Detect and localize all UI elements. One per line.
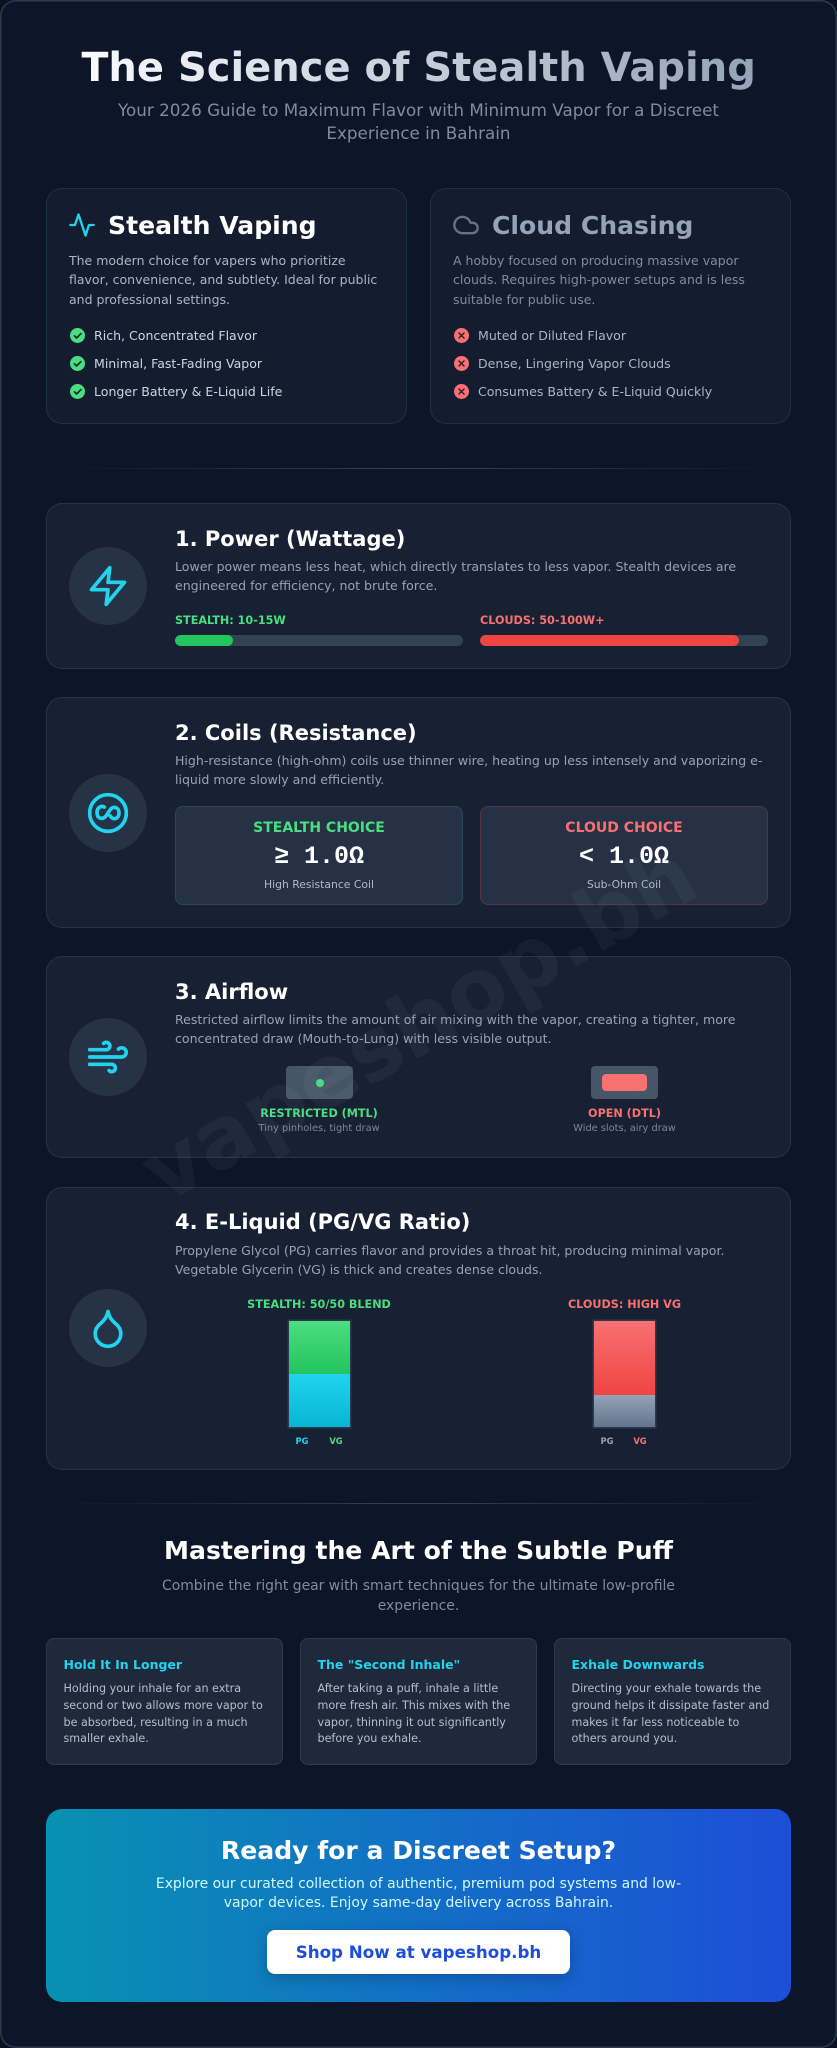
description: liquid more slowly and efficiently. xyxy=(175,772,384,787)
description xyxy=(175,1012,736,1046)
legend: PG: PG xyxy=(295,1436,309,1446)
description: Restricted airflow limits the amount of air mixing with the vapor, creating a tighter, more xyxy=(175,1012,736,1026)
description: Propylene Glycol (PG) carries flavor and provides a throat hit, producing minimal vapor. xyxy=(175,1242,724,1258)
label: stealth wattage: STEALTH: 10-15W xyxy=(175,614,286,627)
icon: wind xyxy=(69,1018,147,1096)
tip title: Hold It In Longer xyxy=(64,1657,182,1672)
description xyxy=(175,1242,724,1277)
panel: airflow xyxy=(46,956,791,1158)
panel: stealth vaping xyxy=(46,188,407,424)
label: clouds blend: CLOUDS: HIGH VG xyxy=(568,1298,681,1311)
legend: PG: PG xyxy=(600,1436,614,1446)
tip text: Directing your exhale towards the xyxy=(572,1682,761,1695)
tip text xyxy=(572,1682,769,1745)
tip text: others around you. xyxy=(572,1732,677,1745)
label: CLOUD CHOICE xyxy=(565,820,683,836)
heading: subtle puff: Mastering the Art of the Subtle Puff xyxy=(164,1536,673,1565)
drawback text: Muted or Diluted Flavor xyxy=(478,328,626,342)
description: suitable for public use. xyxy=(453,292,595,307)
tip text xyxy=(318,1682,510,1745)
label: stealth blend: STEALTH: 50/50 BLEND xyxy=(247,1298,391,1311)
cta text xyxy=(156,1876,681,1911)
bar: stealth wattage xyxy=(175,635,463,646)
description: High-resistance (high-ohm) coils use thinner wire, heating up less intensely and vaporizing e- xyxy=(175,752,762,768)
chart: stealth ratio bar xyxy=(289,1321,350,1427)
description xyxy=(453,252,745,307)
heading: 3. Airflow xyxy=(175,980,288,1004)
caption: High Resistance Coil xyxy=(264,878,374,891)
legend: VG: VG xyxy=(329,1436,343,1446)
tip text: After taking a puff, inhale a little xyxy=(318,1682,498,1695)
label: OPEN (DTL) xyxy=(588,1107,661,1120)
subtitle: Experience in Bahrain xyxy=(326,123,511,143)
benefit list xyxy=(70,328,282,399)
description: Vegetable Glycerin (VG) is thick and creates dense clouds. xyxy=(175,1262,543,1277)
cta text: vapor devices. Enjoy same-day delivery across Bahrain. xyxy=(224,1895,613,1911)
icon: check xyxy=(70,328,85,343)
tip text: vapor, thinning it out significantly xyxy=(318,1716,506,1729)
subheading: experience. xyxy=(378,1598,459,1614)
icon: check xyxy=(70,356,85,371)
subtitle xyxy=(118,100,719,143)
panel: cloud chasing xyxy=(430,188,791,424)
heading: 1. Power (Wattage) xyxy=(175,526,405,550)
caption: Sub-Ohm Coil xyxy=(587,878,661,891)
diagram: open airflow xyxy=(591,1066,658,1099)
legend: VG: VG xyxy=(633,1436,647,1446)
description xyxy=(175,752,762,787)
description: flavor, convenience, and subtlety. Ideal for public xyxy=(69,272,377,287)
icon: lightning bolt xyxy=(69,547,147,625)
tip text xyxy=(64,1682,263,1745)
cta text: Explore our curated collection of authentic, premium pod systems and low- xyxy=(156,1876,681,1892)
tip card: exhale downwards xyxy=(554,1638,791,1765)
chart: clouds ratio bar xyxy=(594,1321,655,1427)
drawback list xyxy=(454,328,712,399)
description: concentrated draw (Mouth-to-Lung) with less visible output. xyxy=(175,1031,551,1046)
box: stealth choice xyxy=(175,806,463,905)
heading: stealth vaping: Stealth Vaping xyxy=(108,211,317,240)
icon: check xyxy=(70,384,85,399)
cta button xyxy=(267,1930,570,1974)
heading: cloud chasing: Cloud Chasing xyxy=(492,211,693,240)
title: The Science of Stealth Vaping xyxy=(81,45,756,91)
caption: Tiny pinholes, tight draw xyxy=(258,1123,380,1134)
panel: coils xyxy=(46,697,791,928)
value: < 1.0Ω xyxy=(579,842,669,871)
label: cloud wattage: CLOUDS: 50-100W+ xyxy=(480,614,605,627)
tip card: hold it in xyxy=(46,1638,283,1765)
tip text: more fresh air. This mixes with the xyxy=(318,1699,510,1712)
heading: 2. Coils (Resistance) xyxy=(175,721,417,745)
description xyxy=(175,558,736,593)
heading: 4. E-Liquid (PG/VG Ratio) xyxy=(175,1210,470,1234)
icon: cross xyxy=(454,384,469,399)
icon: coil xyxy=(69,774,147,852)
drawback text: Dense, Lingering Vapor Clouds xyxy=(478,356,671,370)
label: RESTRICTED (MTL) xyxy=(260,1107,378,1120)
drawback text: Consumes Battery & E-Liquid Quickly xyxy=(478,384,712,398)
tip text: be absorbed, resulting in a much xyxy=(64,1716,248,1729)
subheading xyxy=(162,1578,675,1614)
icon: activity pulse xyxy=(69,213,95,237)
panel: call to action xyxy=(46,1809,791,2002)
description: and professional settings. xyxy=(69,292,230,307)
description: engineered for efficiency, not brute force. xyxy=(175,578,437,593)
benefit text: Rich, Concentrated Flavor xyxy=(94,328,257,342)
description: A hobby focused on producing massive vapor xyxy=(453,252,738,268)
tip text: Holding your inhale for an extra xyxy=(64,1682,241,1695)
watermark: vapeshop.bh xyxy=(124,825,713,1223)
tip card: second inhale xyxy=(300,1638,537,1765)
panel: e-liquid xyxy=(46,1187,791,1470)
benefit text: Minimal, Fast-Fading Vapor xyxy=(94,356,262,370)
tip text: before you exhale. xyxy=(318,1732,422,1745)
icon: cloud xyxy=(453,216,479,234)
subheading: Combine the right gear with smart techniques for the ultimate low-profile xyxy=(162,1578,675,1594)
icon: cross xyxy=(454,356,469,371)
tip title: The "Second Inhale" xyxy=(318,1657,460,1672)
description: The modern choice for vapers who prioritize xyxy=(69,252,346,268)
tip text: ground helps it dissipate faster and xyxy=(572,1699,769,1712)
box: cloud choice xyxy=(480,806,768,905)
description: Lower power means less heat, which directly translates to less vapor. Stealth devices are xyxy=(175,558,736,574)
description: clouds. Requires high-power setups and is less xyxy=(453,272,745,287)
cta button: Shop Now at vapeshop.bh xyxy=(296,1942,541,1962)
tip title: Exhale Downwards xyxy=(572,1657,704,1672)
cta heading: Ready for a Discreet Setup? xyxy=(221,1836,616,1865)
value: ≥ 1.0Ω xyxy=(274,842,364,871)
panel: power xyxy=(46,503,791,669)
label: STEALTH CHOICE xyxy=(253,820,385,836)
tip text: smaller exhale. xyxy=(64,1732,149,1745)
icon: droplet xyxy=(69,1289,147,1367)
subtitle: Your 2026 Guide to Maximum Flavor with Minimum Vapor for a Discreet xyxy=(118,100,719,120)
diagram: restricted airflow xyxy=(286,1066,353,1099)
caption: Wide slots, airy draw xyxy=(573,1123,676,1134)
tip text: makes it far less noticeable to xyxy=(572,1716,739,1729)
icon: cross xyxy=(454,328,469,343)
bar: cloud wattage xyxy=(480,635,768,646)
description xyxy=(68,252,377,307)
benefit text: Longer Battery & E-Liquid Life xyxy=(94,384,282,398)
tip text: second or two allows more vapor to xyxy=(64,1699,263,1712)
